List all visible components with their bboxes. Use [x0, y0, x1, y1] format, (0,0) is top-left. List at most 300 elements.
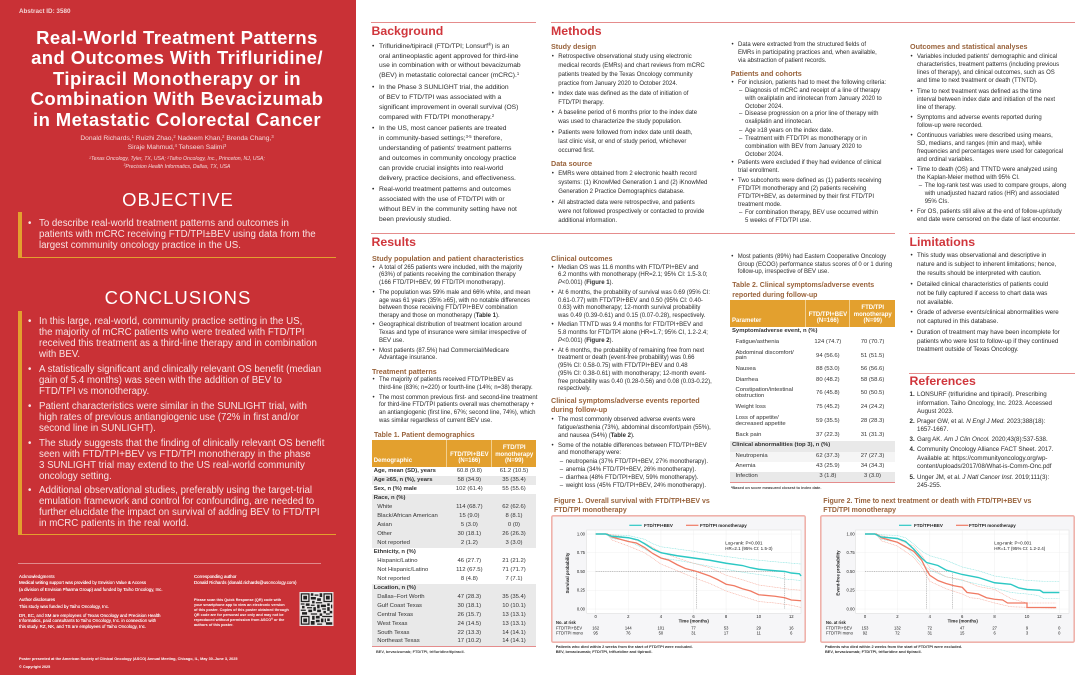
- axis tick labels: 1.00: [577, 532, 586, 536]
- combination therapy text: 5 weeks of FTD/TPI use.: [745, 218, 811, 224]
- conclusion 1: the majority of mCRC patients who were treated with FTD/TPI: [39, 327, 304, 338]
- qr instructions: [194, 598, 289, 627]
- chart: figure 2 kaplan-meier: 6: [961, 614, 964, 619]
- combination therapy text: [745, 209, 878, 225]
- population text 4: [379, 348, 509, 363]
- population text 3: Texas and type of insurance were similar irrespective of: [379, 330, 526, 336]
- chart: figure 1 kaplan-meier: 4: [660, 614, 663, 619]
- conclusion 5: emulation framework and control for confounding, are needed to: [39, 496, 314, 506]
- table 1: patient demographics: 0 (0): [508, 522, 520, 528]
- conclusion 3: high rates of previous antiangiogenic use (72% in first and/or: [39, 412, 299, 422]
- number at risk table: 72: [895, 630, 900, 635]
- background bullet 3: In the US, most cancer patients are treated: [379, 125, 507, 132]
- meeting note: Poster presented at the American Society of Clinical Oncology (ASCO) Annual Meeting, Chicago, IL, May 30–June 3, 2025: [19, 656, 238, 660]
- conclusion 2: A statistically significant and clinically relevant OS benefit (median: [39, 364, 321, 374]
- number at risk table: 16: [789, 626, 794, 631]
- table 2: symptoms and adverse events: Symptom/adverse event, n (%): [732, 328, 817, 334]
- table 1: patient demographics: Northeast Texas: [377, 638, 420, 644]
- panel: references: 2.: [910, 418, 915, 425]
- table 1: patient demographics: 26 (15.7): [458, 612, 481, 618]
- number at risk table: 92: [863, 630, 868, 635]
- disclosure statement: DR, BC, and SM are employees of Texas Oncology and Precision Health: [19, 612, 160, 618]
- follow-up text: [558, 128, 692, 156]
- table 1: patient demographics: 71 (71.7): [502, 567, 526, 573]
- conclusion 3: second line in SUNLIGHT).: [39, 422, 156, 434]
- chart: figure 1 kaplan-meier: 0: [595, 614, 598, 619]
- affiliations: [89, 156, 265, 170]
- censoring text: end date were censored on the date of last encounter.: [917, 217, 1060, 223]
- continuous variables text: and ordinal variables.: [917, 157, 974, 163]
- background bullet 3: delivery, practice decisions, and effectiveness.: [379, 175, 516, 182]
- population text 2: age was 61 years (35% ≥65), with no notable differences: [379, 298, 530, 304]
- criterion 1: Diagnosis of mCRC and receipt of a line of therapy: [745, 88, 880, 94]
- conclusion 4: [39, 438, 324, 482]
- chart: figure 1 kaplan-meier: 6: [692, 614, 695, 619]
- table 2: symptoms and adverse events: 24 (24.2): [861, 404, 884, 410]
- study design text: medical records (EMRs) and chart reviews from mCRC: [558, 63, 705, 69]
- follow-up text: Patients were followed from index date until death,: [558, 130, 692, 136]
- symptoms text 1: [558, 417, 711, 440]
- panel: references: 5.: [910, 474, 915, 481]
- outcomes text 4: free probability was 0.40 (0.28-0.56) and 0.08 (0.03-0.22),: [558, 378, 712, 384]
- background bullet 4: without BEV in the community setting have not: [379, 206, 517, 213]
- number at risk table: 3: [1026, 630, 1029, 635]
- table 1: patient demographics: Ethnicity, n (%): [374, 549, 416, 555]
- axis tick labels: 0.00: [847, 606, 855, 612]
- figure 1 footnote: Patients who died within 2 weeks from the start of FTD/TPI were excluded.: [556, 644, 693, 648]
- table 1: patient demographics: Location, n (%): [374, 585, 416, 591]
- table 1: patient demographics: 10 (10.1): [502, 603, 526, 609]
- number at risk table: 15: [960, 630, 965, 635]
- chart: figure 2 kaplan-meier: 12: [1057, 614, 1062, 619]
- axis tick labels: 0.75: [577, 550, 586, 555]
- background bullet 4: [372, 186, 517, 223]
- title: and Outcomes With Trifluridine/: [31, 47, 323, 68]
- limitation 4: treatment outside of Texas Oncology.: [917, 346, 1019, 353]
- reference 4: content/uploads/2017/08/What-is-Comm-Onc.pdf: [917, 463, 1051, 470]
- exclusion text: Patients were excluded if they had evidence of clinical: [738, 160, 881, 166]
- data source text: [558, 170, 707, 197]
- axis tick labels: [577, 532, 586, 612]
- subheading: table 1: Table 1. Patient demographics: [374, 432, 475, 439]
- acknowledgments: (a division of Envision Pharma Group) and funded by Taiho Oncology, Inc.: [19, 587, 163, 592]
- axis tick labels: [847, 532, 855, 612]
- reference 1: [910, 391, 1052, 415]
- treatment text 2: for third-line FTD/TPI patients overall was chemotherapy +: [379, 402, 534, 408]
- symptoms text 1: The most commonly observed adverse events were: [558, 417, 695, 423]
- number at risk table: 17: [724, 630, 729, 635]
- table 1: patient demographics: 13 (13.1): [502, 612, 526, 618]
- conclusion 4: seen with FTD/TPI+BEV vs FTD/TPI monotherapy in the phase: [39, 448, 311, 460]
- number at risk table: 77: [691, 626, 696, 631]
- affiliations: 3Precision Health Informatics, Dallas, TX, USA: [124, 163, 230, 170]
- background bullet 4: been previously studied.: [379, 216, 451, 223]
- acknowledgments: Medical writing support was provided by Envision Value & Access: [19, 580, 146, 585]
- inclusion criteria: For inclusion, patients had to meet the following criteria:: [738, 80, 886, 86]
- table 1: patient demographics: 35 (35.4): [502, 594, 526, 600]
- number at risk table: [556, 620, 794, 635]
- conclusion 5: in mCRC patients in the real world.: [39, 518, 189, 528]
- background bullet 1: (BEV) in metastatic colorectal cancer (mCRC).1: [379, 71, 519, 79]
- table 1: patient demographics: Other: [377, 531, 392, 537]
- table 1: patient demographics: Sex, n (%) male: [374, 486, 417, 492]
- panel: figure 2 time to next treatment: [820, 498, 1075, 654]
- axis tick labels: 0.50: [577, 569, 586, 574]
- exclusion text: [738, 159, 881, 175]
- table 1: patient demographics: 26 (26.3): [502, 531, 526, 537]
- disclosure statement: [19, 612, 160, 629]
- subheading: study population: Study population and patient characteristics: [372, 254, 524, 263]
- table 1: patient demographics: 8 (8.1): [505, 513, 522, 519]
- background bullet 1: [372, 42, 521, 79]
- population text 3: BEV use.: [379, 338, 404, 344]
- outcomes text 1: Median OS was 11.6 months with FTD/TPI+BEV and: [558, 264, 698, 270]
- chart: figure 2 kaplan-meier: 0: [864, 614, 867, 619]
- outcomes text 1: [558, 264, 708, 288]
- limitation 3: [917, 309, 1059, 327]
- conclusion 4: oncology setting.: [39, 470, 112, 482]
- outcomes text 2: 0.61-0.77) with FTD/TPI+BEV and 0.50 (95% CI: 0.40-: [558, 298, 703, 304]
- disclosure statement: Informatics, paid consultants to Taiho Oncology, Inc. in connection with: [19, 618, 156, 623]
- table 1: patient demographics: Central Texas: [377, 612, 413, 618]
- chart: figure 2 kaplan-meier: 10: [1025, 614, 1030, 619]
- conclusion 1: received this treatment as a third-line therapy and in combination: [39, 338, 317, 349]
- table 2: symptoms and adverse events: 3 (1.8): [819, 473, 836, 479]
- table 1: patient demographics: 30 (18.1): [458, 531, 481, 537]
- symptoms text: follow-up were recorded.: [917, 123, 983, 129]
- legend: FTD/TPI+BEV: [644, 523, 673, 528]
- icon: qr code: [300, 592, 334, 626]
- symptoms text 1: and nausea (54%) (Table 2).: [558, 433, 635, 439]
- subcohorts text: [738, 177, 881, 209]
- number at risk table: 27: [992, 626, 998, 631]
- y axis title: Survival probability: [565, 552, 570, 593]
- objective text: [18, 212, 336, 258]
- number at risk table: 6: [790, 630, 793, 635]
- table 1: patient demographics: 47 (28.3): [458, 594, 481, 600]
- panel: background: [371, 22, 536, 233]
- conclusion 2: gain of 5.4 months) was seen with the addition of BEV to: [39, 374, 282, 386]
- subheading: outcomes: Outcomes and statistical analyses: [910, 42, 1027, 50]
- number at risk table: 0: [1058, 626, 1061, 631]
- outcomes text 3: Median TTNTD was 9.4 months for FTD/TPI+BEV and: [558, 322, 703, 328]
- title: in Metastatic Colorectal Cancer: [33, 109, 321, 130]
- table 2: symptoms and adverse events: Loss of appetite/: [736, 415, 779, 421]
- index date text: Index date was defined as the date of initiation of: [558, 91, 688, 97]
- table 2: symptoms and adverse events: Abdominal discomfort/: [736, 350, 794, 356]
- number at risk table: 0: [1058, 630, 1061, 635]
- conclusion 2: [39, 364, 321, 396]
- population text 4: Advantage insurance.: [379, 355, 437, 361]
- number at risk table: FTD/TPI mono: [556, 630, 584, 635]
- subheading: clinical symptoms: during follow-up: [551, 405, 607, 414]
- limitation 3: not captured in this database.: [917, 318, 998, 325]
- outcomes text 2: [558, 290, 710, 321]
- acknowledgments: [19, 574, 163, 592]
- criterion 1: [745, 87, 882, 111]
- panel: limitations: [909, 233, 1075, 368]
- table 2: symptoms and adverse events: 51 (51.5): [861, 353, 884, 359]
- heading: background: Background: [372, 24, 443, 38]
- table 2: symptoms and adverse events: 34 (34.3): [861, 463, 884, 469]
- limitation 2: not be fully captured if access to chart data was: [917, 290, 1047, 297]
- log-rank text: 95% CIs.: [925, 199, 949, 205]
- heading: methods: Methods: [551, 24, 602, 38]
- table 2: symptoms and adverse events: 43 (25.9): [816, 463, 840, 469]
- limitation 1: This study was observational and descriptive in: [917, 252, 1046, 259]
- axis tick labels: 0.25: [847, 588, 855, 593]
- number at risk table: 47: [960, 626, 965, 631]
- corresponding author: [194, 574, 296, 585]
- number at risk table: 132: [894, 626, 902, 631]
- table 2: symptoms and adverse events: 27 (27.3): [861, 453, 884, 459]
- table 1: patient demographics: 14 (14.1): [502, 638, 526, 644]
- table 1: patient demographics: [372, 440, 536, 647]
- table 2: symptoms and adverse events: 70 (70.7): [861, 339, 884, 345]
- figure 1 caption: FTD/TPI monotherapy: [554, 507, 627, 514]
- symptoms text 1: fatigue/asthenia (73%), abdominal discomfort/pain (55%),: [558, 425, 711, 431]
- outcomes text 2: 0.63) with monotherapy; 12-month survival probability: [558, 305, 700, 311]
- subheading: data source: Data source: [551, 158, 592, 168]
- table 2: symptoms and adverse events: FTD/TPI: [861, 305, 884, 311]
- table 1: patient demographics: 21 (21.2): [502, 558, 526, 564]
- time to next treatment text: line of therapy.: [917, 105, 956, 111]
- axis tick labels: 0.25: [577, 588, 586, 593]
- background bullet 3: [372, 125, 516, 182]
- number at risk table: 144: [625, 626, 632, 631]
- continuous variables text: Continuous variables were described using means,: [917, 133, 1053, 139]
- treatment text 2: [379, 395, 537, 425]
- outcomes text 4: At 6 months, the probability of remaining free from next: [558, 348, 704, 354]
- table 2: symptoms and adverse events: Diarrhea: [736, 377, 758, 383]
- variables text: lines of therapy), and clinical outcomes, such as OS: [917, 70, 1055, 76]
- kaplan-meier text: [917, 166, 1057, 182]
- number at risk table: 9: [1026, 626, 1029, 631]
- number at risk table: FTD/TPI mono: [826, 630, 854, 635]
- legend: FTD/TPI monotherapy: [700, 523, 747, 528]
- table 1: patient demographics: 17 (10.2): [458, 638, 481, 644]
- follow-up text: occurred first.: [558, 148, 595, 154]
- copyright: © Copyright 2025: [19, 665, 50, 669]
- panel: references: [909, 373, 1075, 491]
- background bullet 1: oral antineoplastic agent approved for third-line: [379, 53, 518, 60]
- table 2: symptoms and adverse events: 62 (37.3): [816, 453, 840, 459]
- study design text: Retrospective observational study using electronic: [558, 54, 692, 60]
- combination therapy text: For combination therapy, BEV use occurred within: [745, 210, 878, 216]
- background bullet 4: associated with the use of FTD/TPI with or: [379, 196, 505, 203]
- number at risk table: FTD/TPI+BEV: [826, 626, 852, 631]
- symptoms text: Symptoms and adverse events reported during: [917, 115, 1042, 121]
- symptoms text: [917, 114, 1042, 130]
- table 1: patient demographics: 61.2 (10.5): [500, 468, 528, 474]
- chart: figure 1 kaplan-meier: 10: [756, 614, 762, 619]
- background bullet 4: Real-world treatment patterns and outcomes: [379, 186, 511, 193]
- conclusion 1: with BEV.: [39, 349, 80, 360]
- limitation 1: nature and is subject to inherent limitations; hence,: [917, 261, 1056, 268]
- baseline text: was used to characterize the study population.: [558, 119, 682, 125]
- background bullet 3: can provide crucial insights into real-world: [379, 165, 503, 172]
- conclusion 1: [39, 316, 317, 360]
- treatment text 1: The majority of patients received FTD/TPI±BEV as: [379, 377, 513, 383]
- x axis title: Time (months): [948, 619, 978, 624]
- title: Tipiracil Monotherapy or in: [53, 68, 301, 89]
- number at risk table: No. at risk: [556, 620, 577, 625]
- continuous variables text: frequencies and percentages were used for categorical: [917, 149, 1063, 155]
- table 1: patient demographics: 112 (67.5): [456, 567, 483, 573]
- table 1: patient demographics: 58 (34.9): [458, 477, 481, 483]
- chart: figure 1 kaplan-meier: 8: [725, 614, 728, 619]
- population text 2: therapy and those on monotherapy (Table 1).: [379, 313, 500, 319]
- reference 2: Prager GW, et al. N Engl J Med. 2023;388(18):: [917, 418, 1045, 425]
- chart: figure 2 kaplan-meier: 8: [993, 614, 996, 619]
- table 1: patient demographics: Age, mean (SD), years: [374, 468, 436, 474]
- table 1: patient demographics: Not Hispanic/Latino: [377, 567, 428, 573]
- background bullet 3: understanding of patients' treatment patterns: [379, 145, 512, 152]
- x axis title: Time (months): [679, 619, 709, 624]
- qr instructions: your smartphone app to view an electronic version: [194, 602, 285, 606]
- author disclosures: Author disclosures: [19, 596, 55, 602]
- heading: objective: OBJECTIVE: [122, 189, 234, 210]
- criterion 1: October 2024.: [745, 104, 783, 110]
- background bullet 2: [372, 84, 518, 121]
- continuous variables text: [917, 132, 1063, 164]
- table 2: symptoms and adverse events: Constipation/intestinal: [736, 387, 793, 393]
- conclusion 5: further elucidate the impact on survival of adding BEV to FTD/TPI: [39, 506, 320, 518]
- neutropenia: neutropenia (37% FTD/TPI+BEV, 27% monotherapy).: [566, 458, 708, 464]
- limitation 4: Duration of treatment may have been incomplete for: [917, 329, 1060, 336]
- table 1: patient demographics: Hispanic/Latino: [377, 558, 417, 564]
- table 1: patient demographics: (N=166): [458, 458, 480, 464]
- outcomes text 4: (95% CI: 0.38-0.61) with monotherapy; 12-month event-: [558, 371, 706, 377]
- table 2: symptoms and adverse events: Anemia: [736, 463, 755, 469]
- number at risk table: 50: [659, 630, 664, 635]
- legend: [899, 523, 1016, 528]
- outcomes text 2: was 0.49 (0.39-0.61) and 0.15 (0.07-0.28), respectively.: [558, 313, 705, 319]
- study design text: patients treated by the Texas Oncology community: [558, 72, 693, 78]
- background bullet 2: In the Phase 3 SUNLIGHT trial, the addition: [379, 84, 509, 91]
- treatment text 1: third-line (83%; n=220) or fourth-line (14%; n=38) therapy.: [379, 385, 533, 391]
- background bullet 3: in community-based settings;3-5 therefore,: [379, 134, 502, 142]
- limitation 1: [917, 252, 1056, 278]
- table 1: patient demographics: 102 (61.4): [456, 486, 483, 492]
- censoring text: For OS, patients still alive at the end of follow-up/study: [917, 209, 1062, 215]
- heading: references: References: [910, 374, 976, 388]
- table 2: symptoms and adverse events: 3 (3.0): [864, 473, 881, 479]
- continuous variables text: SD, medians, and ranges (min and max), while: [917, 141, 1042, 147]
- chart: figure 1 kaplan-meier: 2: [627, 614, 630, 619]
- ecog text: Group (ECOG) performance status scores of 0 or 1 during: [738, 262, 892, 268]
- study design text: [558, 53, 705, 89]
- number at risk table: 153: [862, 626, 869, 631]
- figure 2 caption: FTD/TPI monotherapy: [823, 507, 896, 514]
- heading: conclusions: CONCLUSIONS: [105, 287, 251, 308]
- qr instructions: Please scan this Quick Response (QR) code with: [194, 598, 281, 602]
- table 1: patient demographics: 114 (68.7): [456, 504, 483, 510]
- criterion 4: [745, 135, 867, 159]
- y axis title: Event-free probability: [836, 550, 840, 596]
- time to next treatment text: Time to next treatment was defined as the time: [917, 89, 1042, 95]
- population text 2: between those receiving FTD/TPI+BEV combination: [379, 305, 518, 311]
- number at risk table: 162: [592, 626, 600, 631]
- subheading: clinical symptoms: [551, 396, 700, 414]
- background bullet 3: and outcomes in community oncology practice: [379, 155, 516, 162]
- population text 1: (63%) of patients receiving the combination therapy: [379, 272, 516, 278]
- ecog text: follow-up, irrespective of BEV use.: [738, 269, 829, 275]
- table 1: patient demographics: Race, n (%): [374, 495, 405, 501]
- differences list: [560, 458, 708, 489]
- structured fields text: [738, 41, 877, 65]
- heading: limitations: Limitations: [910, 235, 975, 249]
- ecog text: Most patients (89%) had Eastern Cooperative Oncology: [738, 254, 886, 260]
- reference 2: 1657-1667.: [917, 426, 948, 433]
- table 1: patient demographics: 46 (27.7): [458, 558, 481, 564]
- number at risk table: 6: [993, 630, 996, 635]
- table 2: symptoms and adverse events: 58 (58.6): [861, 377, 884, 383]
- table 1: patient demographics: 7 (7.1): [505, 576, 522, 582]
- table 2: symptoms and adverse events: (N=99): [863, 318, 882, 324]
- subheading: treatment patterns: Treatment patterns: [372, 366, 437, 376]
- figure 2 caption: Figure 2. Time to next treatment or death with FTD/TPI+BEV vs: [823, 498, 1031, 504]
- table 1: patient demographics: 60.8 (9.8): [457, 468, 482, 474]
- conclusions text: [18, 311, 336, 535]
- diarrhea: diarrhea (48% FTD/TPI+BEV, 59% monotherapy).: [566, 475, 698, 481]
- kaplan-meier text: the Kaplan-Meier method with 95% CI.: [917, 175, 1020, 181]
- symptoms text 2: [558, 442, 707, 458]
- subheading: patients and cohorts: Patients and cohorts: [731, 68, 802, 78]
- outcomes text 1: P<0.001) (Figure 1).: [558, 280, 613, 286]
- conclusion 2: FTD/TPI vs monotherapy.: [39, 386, 149, 396]
- panel: methods: [551, 22, 1075, 233]
- table 1: patient demographics: Not reported: [377, 576, 410, 582]
- number at risk table: 31: [691, 630, 696, 635]
- table 2: symptoms and adverse events: Infection: [736, 473, 758, 479]
- figure 1 footnote: [556, 644, 693, 654]
- table 2: symptoms and adverse events: Clinical abnormalities (top 3), n (%): [732, 442, 830, 448]
- retrospective text: additional information.: [558, 218, 617, 224]
- background bullet 2: of BEV to FTD/TPI was associated with a: [379, 94, 501, 101]
- affiliations: 1Texas Oncology, Tyler, TX, USA; 2Taiho Oncology, Inc., Princeton, NJ, USA;: [89, 156, 265, 162]
- figure 1 caption: Figure 1. Overall survival with FTD/TPI+BEV vs: [554, 498, 710, 504]
- censoring text: [917, 208, 1062, 224]
- table 1: patient demographics: West Texas: [377, 621, 407, 627]
- reference 4: Available at: https://communityoncology.org/wp-: [917, 455, 1047, 462]
- variables text: and time to next treatment or death (TTNTD).: [917, 78, 1037, 84]
- number at risk table: 31: [928, 630, 933, 635]
- data source text: EMRs were obtained from 2 electronic health record: [558, 171, 697, 177]
- panel: references: 4.: [910, 446, 915, 453]
- criterion 3: Age ≥18 years on the index date.: [745, 128, 833, 134]
- table 2: symptoms and adverse events: 88 (53.0): [816, 366, 840, 372]
- structured fields text: Data were extracted from the structured fields of: [738, 42, 866, 48]
- limitation 2: not available.: [917, 299, 953, 306]
- objective bullet: [39, 218, 316, 250]
- limitation 4: [917, 329, 1060, 355]
- table 1: patient demographics: 8 (4.8): [461, 576, 478, 582]
- table 2: symptoms and adverse events: decreased appetite: [736, 421, 786, 427]
- limitation 2: Detailed clinical characteristics of patients could: [917, 281, 1048, 288]
- subheading: clinical symptoms: Clinical symptoms/adverse events reported: [551, 396, 700, 405]
- data source text: Generation 2 Practice Demographics database.: [558, 189, 685, 195]
- table 2: symptoms and adverse events: Fatigue/asthenia: [736, 339, 779, 345]
- subheading: study design: Study design: [551, 42, 596, 50]
- panel: references: 3.: [910, 436, 915, 443]
- figure 2 footnote: BEV, bevacizumab; FTD/TPI, trifluridine and tipiracil.: [825, 649, 922, 654]
- chart: figure 1 kaplan-meier: 12: [789, 614, 794, 619]
- exclusion text: trial enrollment.: [738, 168, 779, 174]
- authors: Donald Richards,1 Ruizhi Zhao,2 Nadeem Khan,2 Brenda Chang,3: [80, 134, 274, 142]
- reference 5: 245-255.: [917, 482, 941, 489]
- population text 3: Geographical distribution of treatment location around: [379, 322, 522, 328]
